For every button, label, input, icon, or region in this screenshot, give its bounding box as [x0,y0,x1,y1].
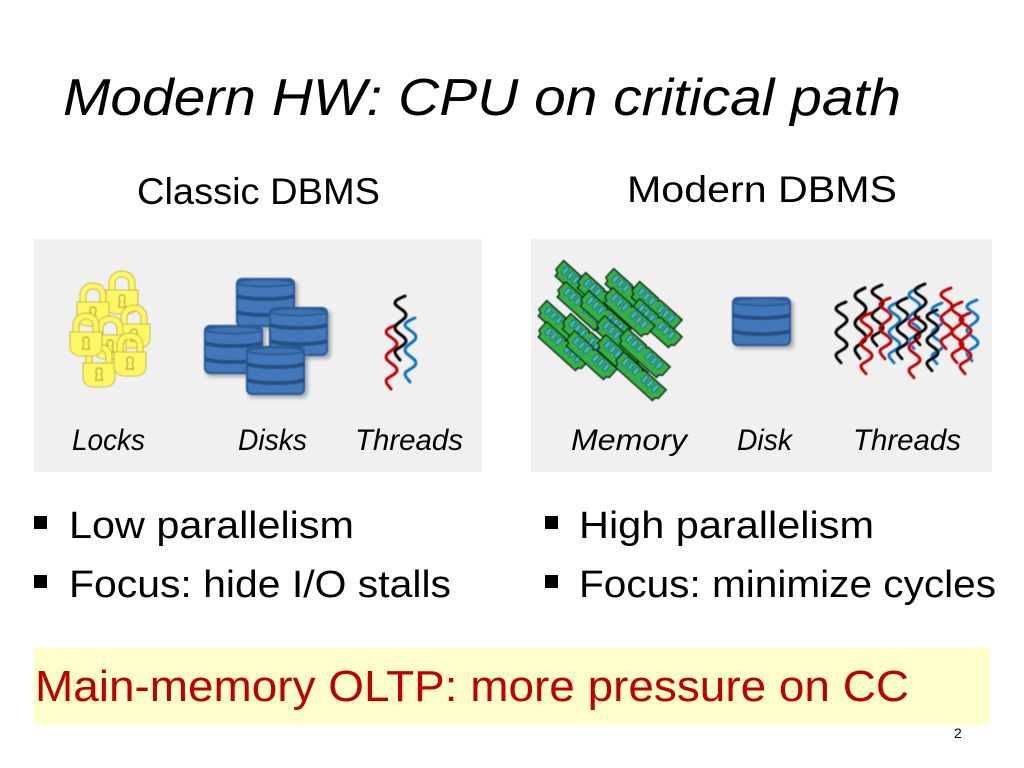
bullet list: classic: Low parallelism [69,505,354,547]
callout: Main-memory OLTP: more pressure on CC [35,662,909,711]
icon: disk [733,298,794,349]
label: Disks: Disks [238,424,307,457]
panel: classic DBMS [34,239,482,472]
bullet list: classic [34,505,451,606]
bullet list: classic: Focus: hide I/O stalls [69,564,451,606]
label: Locks: Locks [72,424,145,457]
callout [34,648,990,725]
label: Memory: Memory [571,424,689,457]
icon: disks [205,279,331,398]
icon: threads [386,296,416,389]
title: Modern HW: CPU on critical path [63,69,901,127]
bullet list: modern: High parallelism [579,505,874,547]
bullet list: modern [545,505,996,606]
panel: modern DBMS [531,239,992,472]
label: Threads: Threads [853,424,961,457]
label: Threads: Threads [355,424,463,457]
page number: 2 [954,725,962,741]
bullet list: modern: Focus: minimize cycles [579,564,996,606]
heading: Modern DBMS: Modern DBMS [627,169,897,210]
label: Disk: Disk [737,424,794,457]
icon: memory [535,261,682,402]
icon: threads [836,284,978,378]
heading: Classic DBMS: Classic DBMS [137,171,380,212]
icon: locks [70,271,150,387]
